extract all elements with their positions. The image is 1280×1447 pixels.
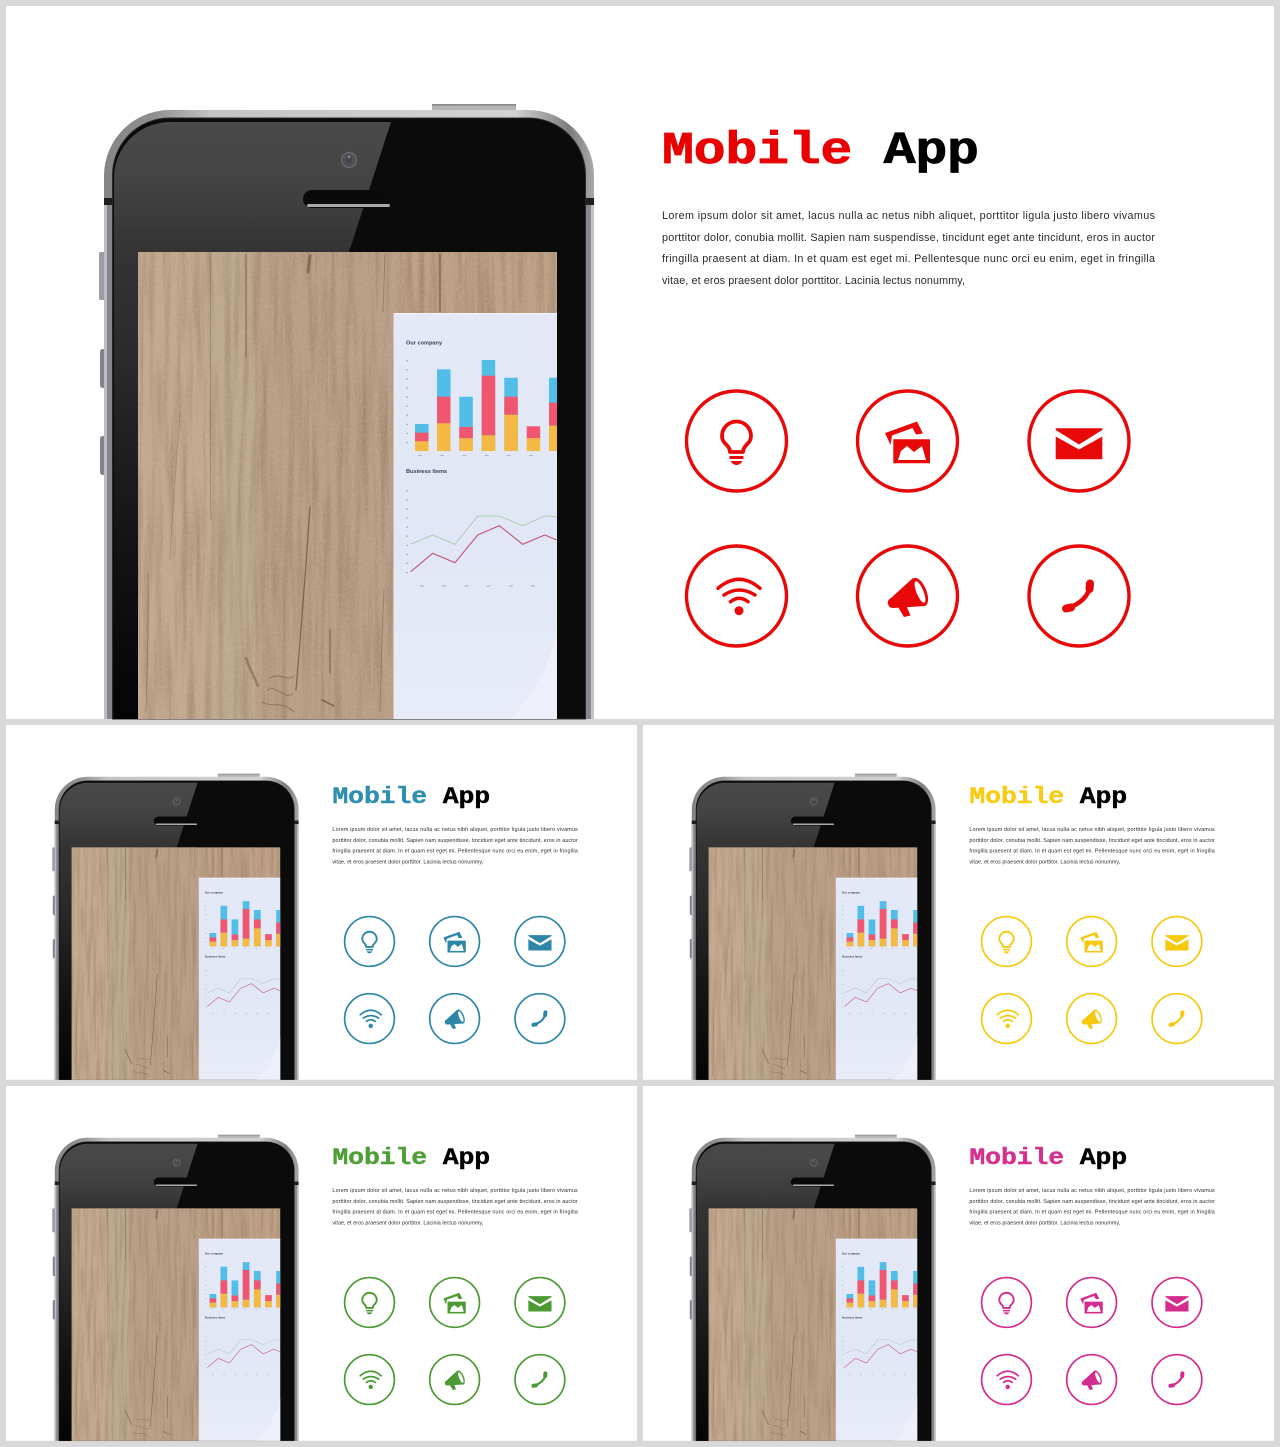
body text [969, 827, 1215, 865]
body text: porttitor dolor, conubia mollit. Sapien nam suspendisse, tincidunt eget ante tincidunt, eros in auctor [332, 838, 578, 844]
title: Mobile App [969, 1146, 1127, 1171]
icon: wifi [686, 546, 786, 646]
icon: pictures [1067, 1278, 1116, 1327]
icon: megaphone [1067, 1355, 1116, 1404]
body text: Lorem ipsum dolor sit amet, lacus nulla ac netus nibh aliquet, porttitor ligula justo libero vivamus [662, 210, 1156, 222]
body text [662, 210, 1156, 287]
icon: phone handset [1152, 1355, 1202, 1404]
icon: envelope [1152, 917, 1202, 966]
icon: light bulb [686, 391, 786, 491]
icon: megaphone [430, 1355, 479, 1404]
icon: envelope [515, 1278, 565, 1327]
icon: pictures [430, 1278, 479, 1327]
icon: wifi [982, 994, 1031, 1043]
chart heading: our company: Our company [205, 1251, 223, 1255]
body text: Lorem ipsum dolor sit amet, lacus nulla ac netus nibh aliquet, porttitor ligula justo libero vivamus [969, 827, 1215, 833]
icon: megaphone [1067, 994, 1116, 1043]
phone mockup [52, 774, 299, 1080]
body text [332, 827, 578, 865]
icon: light bulb [345, 917, 394, 966]
panel: yellow slide [643, 725, 1274, 1080]
icon: phone handset [1029, 546, 1129, 646]
chart heading: our company: Our company [842, 890, 860, 894]
body text: porttitor dolor, conubia mollit. Sapien nam suspendisse, tincidunt eget ante tincidunt, eros in auctor [332, 1199, 578, 1205]
phone mockup [689, 774, 936, 1080]
title: Mobile App [662, 125, 979, 177]
title: Mobile App [969, 785, 1127, 810]
chart heading: our company: Our company [842, 1251, 860, 1255]
title: Mobile App [332, 785, 490, 810]
body text: vitae, et eros praesent dolor porttitor. Lacinia lectus nonummy, [662, 275, 965, 287]
body text: fringilla praesent at diam. In et quam est eget mi. Pellentesque nunc orci eu enim, eget in fringilla [969, 848, 1215, 854]
icon: pictures [858, 391, 958, 491]
icon: envelope [1029, 391, 1129, 491]
icon grid [982, 917, 1202, 1043]
icon: megaphone [858, 546, 958, 646]
panel: blue slide [6, 725, 637, 1080]
body text: porttitor dolor, conubia mollit. Sapien nam suspendisse, tincidunt eget ante tincidunt, eros in auctor [969, 838, 1215, 844]
phone mockup [99, 104, 594, 719]
chart heading: business items: Business Items [842, 954, 863, 958]
icon: wifi [345, 994, 394, 1043]
icon: phone handset [515, 1355, 565, 1404]
body text: Lorem ipsum dolor sit amet, lacus nulla ac netus nibh aliquet, porttitor ligula justo libero vivamus [332, 1188, 578, 1194]
body text: vitae, et eros praesent dolor porttitor. Lacinia lectus nonummy, [969, 1220, 1120, 1226]
icon grid [686, 391, 1129, 646]
icon: megaphone [430, 994, 479, 1043]
chart heading: business items: Business Items [205, 1315, 226, 1319]
phone mockup [52, 1135, 299, 1441]
chart heading: business items: Business Items [406, 469, 447, 475]
panel: red large slide [6, 6, 1274, 719]
body text: fringilla praesent at diam. In et quam est eget mi. Pellentesque nunc orci eu enim, eget in fringilla [969, 1209, 1215, 1215]
body text: porttitor dolor, conubia mollit. Sapien nam suspendisse, tincidunt eget ante tincidunt, eros in auctor [969, 1199, 1215, 1205]
body text [969, 1188, 1215, 1226]
icon: phone handset [515, 994, 565, 1043]
icon: light bulb [345, 1278, 394, 1327]
icon: envelope [515, 917, 565, 966]
icon: wifi [345, 1355, 394, 1404]
panel: magenta slide [643, 1086, 1274, 1441]
body text: vitae, et eros praesent dolor porttitor. Lacinia lectus nonummy, [332, 1220, 483, 1226]
title: Mobile App [332, 1146, 490, 1171]
body text: Lorem ipsum dolor sit amet, lacus nulla ac netus nibh aliquet, porttitor ligula justo libero vivamus [969, 1188, 1215, 1194]
body text: fringilla praesent at diam. In et quam est eget mi. Pellentesque nunc orci eu enim, eget in fringilla [332, 848, 578, 854]
chart heading: business items: Business Items [205, 954, 226, 958]
panel: green slide [6, 1086, 637, 1441]
icon: envelope [1152, 1278, 1202, 1327]
icon: phone handset [1152, 994, 1202, 1043]
body text: vitae, et eros praesent dolor porttitor. Lacinia lectus nonummy, [332, 859, 483, 865]
icon grid [982, 1278, 1202, 1404]
body text: porttitor dolor, conubia mollit. Sapien nam suspendisse, tincidunt eget ante tincidunt, eros in auctor [662, 232, 1155, 244]
icon: wifi [982, 1355, 1031, 1404]
icon: pictures [430, 917, 479, 966]
body text: fringilla praesent at diam. In et quam est eget mi. Pellentesque nunc orci eu enim, eget in fringilla [332, 1209, 578, 1215]
chart heading: our company: Our company [406, 340, 443, 346]
body text: fringilla praesent at diam. In et quam est eget mi. Pellentesque nunc orci eu enim, eget in fringilla [662, 253, 1155, 265]
body text [332, 1188, 578, 1226]
chart heading: business items: Business Items [842, 1315, 863, 1319]
phone mockup [689, 1135, 936, 1441]
icon: pictures [1067, 917, 1116, 966]
icon grid [345, 917, 565, 1043]
body text: Lorem ipsum dolor sit amet, lacus nulla ac netus nibh aliquet, porttitor ligula justo libero vivamus [332, 827, 578, 833]
body text: vitae, et eros praesent dolor porttitor. Lacinia lectus nonummy, [969, 859, 1120, 865]
icon grid [345, 1278, 565, 1404]
chart heading: our company: Our company [205, 890, 223, 894]
icon: light bulb [982, 917, 1031, 966]
icon: light bulb [982, 1278, 1031, 1327]
